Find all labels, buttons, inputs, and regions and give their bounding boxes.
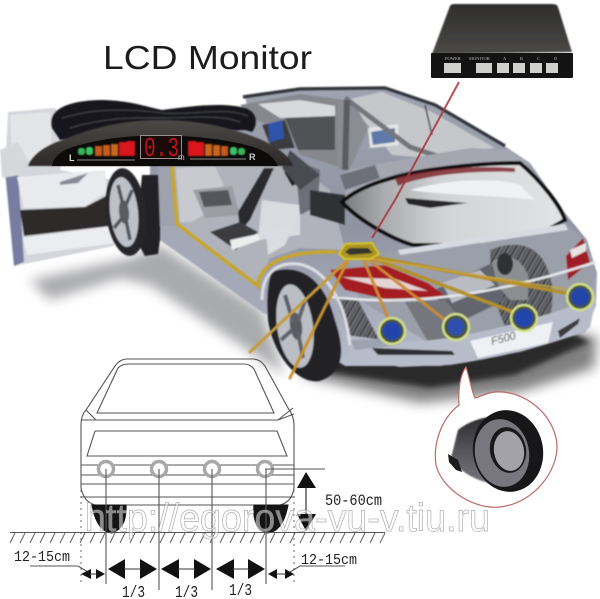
tail lights — [330, 265, 448, 299]
car body: F500 — [490, 330, 518, 348]
dimension labels: 12-15cm — [301, 552, 357, 569]
license plate — [470, 322, 553, 358]
dimension arrows — [81, 472, 316, 579]
port labels — [445, 56, 558, 61]
rear-left wheel — [267, 269, 341, 381]
bumper — [345, 298, 596, 367]
box front — [431, 53, 573, 78]
sensor callout bubble — [435, 367, 557, 507]
sensor 3 — [511, 305, 537, 331]
leader lines — [30, 566, 345, 572]
open door — [0, 108, 116, 266]
door sill — [160, 225, 262, 312]
body lines — [81, 408, 294, 497]
third spacing arrows — [108, 559, 265, 579]
ground shadow under car — [30, 245, 597, 403]
front wheel — [102, 165, 176, 258]
sensors on bumper — [379, 284, 593, 344]
wheel arch — [262, 264, 350, 345]
rear window — [342, 163, 565, 245]
dotted guides — [81, 490, 294, 584]
rear window outline — [97, 364, 274, 413]
side glass — [345, 92, 495, 158]
ground — [10, 532, 385, 534]
height arrow — [297, 472, 316, 531]
port labels: MONITOR — [469, 56, 490, 61]
LCD display unit: L — [69, 153, 75, 163]
sensor 2 — [443, 314, 469, 340]
body shell — [150, 88, 597, 366]
dimension labels: 12-15cm — [14, 549, 70, 566]
dimension labels — [14, 492, 382, 599]
port labels: D — [554, 56, 558, 61]
sensor 1 — [379, 318, 405, 344]
port labels: A — [503, 56, 507, 61]
sensor rings — [98, 462, 272, 476]
watermark url: http://egorova-vu-v.tiu.ru — [85, 497, 490, 540]
display housing — [28, 120, 294, 166]
vertical guide lines — [106, 469, 325, 590]
rear seat screen — [368, 124, 399, 148]
port labels: B — [520, 56, 523, 61]
car rear outline — [81, 359, 294, 505]
car body — [150, 88, 597, 381]
windshield front cabin — [240, 94, 350, 170]
title: LCD Monitor — [103, 39, 312, 76]
callout outline — [435, 367, 557, 507]
sensor face — [466, 405, 550, 497]
LCD display unit: R — [249, 152, 256, 162]
cabin interior — [163, 165, 345, 284]
control box — [431, 4, 573, 78]
LCD display unit — [28, 120, 294, 166]
sensor body — [451, 417, 505, 485]
rear hatch cutaway — [345, 222, 596, 350]
upper rear deck — [345, 148, 530, 198]
ground hatching — [10, 533, 385, 543]
box top — [432, 4, 572, 54]
control hub on car — [339, 243, 379, 259]
cable coil — [51, 100, 256, 140]
port labels: POWER — [445, 56, 461, 61]
dimension labels: 50-60cm — [325, 492, 382, 510]
unit and side labels: m — [178, 153, 185, 162]
left LED bars — [78, 141, 135, 156]
rear installation diagram — [10, 359, 385, 590]
sensor 4 — [567, 284, 593, 310]
ports — [444, 63, 558, 73]
roof edge — [243, 88, 505, 146]
right LED bars — [188, 141, 245, 156]
digit box: 0.3 — [144, 135, 179, 165]
port labels: C — [537, 56, 540, 61]
yellow wiring harness — [172, 166, 566, 378]
edge spacing arrows — [81, 569, 294, 579]
red line from control box to hub — [372, 82, 459, 238]
wheels — [92, 505, 288, 533]
